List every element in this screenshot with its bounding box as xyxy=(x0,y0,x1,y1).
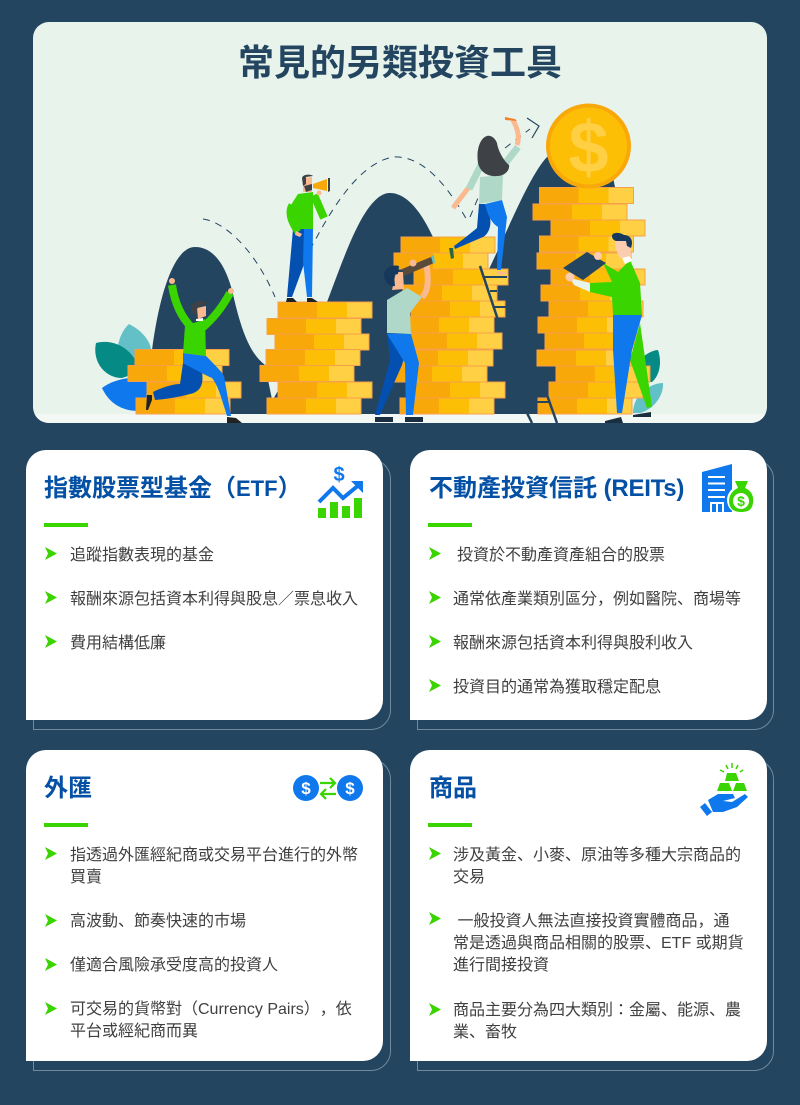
list item: 通常依產業類別區分，例如醫院、商場等 xyxy=(453,591,741,608)
bullet xyxy=(429,591,441,604)
bullet xyxy=(45,958,57,971)
heading: REITs: 不動產投資信託 (REITs) xyxy=(429,475,684,502)
coin stack 3 xyxy=(393,237,508,414)
panel: ETF xyxy=(26,450,383,720)
list item: 費用結構低廉 xyxy=(70,635,166,652)
heading: ETF: 指數股票型基金（ETF） xyxy=(44,475,302,502)
list item: 報酬來源包括資本利得與股利收入 xyxy=(453,635,693,652)
list item: 商品主要分為四大類別：金屬、能源、農 業、畜牧 xyxy=(453,1002,741,1041)
bullet xyxy=(45,914,57,927)
heading: commodities: 商品 xyxy=(429,775,477,802)
accent bar xyxy=(44,523,88,527)
list item: 可交易的貨幣對（Currency Pairs），依 平台或經紀商而異 xyxy=(70,1001,352,1040)
bullet xyxy=(45,847,57,860)
leaves left xyxy=(95,324,151,411)
bullet list: ETF xyxy=(45,546,358,652)
person: man with clipboard xyxy=(563,233,652,423)
person: climbing woman xyxy=(449,117,518,275)
icon: rising chart with dollar xyxy=(318,464,363,518)
bullet xyxy=(429,679,441,692)
list item: 指透過外匯經紀商或交易平台進行的外幣 買賣 xyxy=(70,847,358,886)
bullet xyxy=(429,912,441,925)
person: cheering man xyxy=(146,278,242,423)
bullet list: FX xyxy=(45,846,358,1040)
title: 常見的另類投資工具 xyxy=(238,42,562,83)
ground strip xyxy=(33,414,767,423)
bullet xyxy=(429,547,441,560)
heading: FX: 外匯 xyxy=(44,775,92,802)
bullet xyxy=(429,847,441,860)
dashed trajectory lines xyxy=(203,129,530,297)
list item: 僅適合風險承受度高的投資人 xyxy=(70,957,278,974)
icon: hand holding gold bars xyxy=(700,763,748,816)
accent bar xyxy=(44,823,88,827)
list item: 投資於不動產資產組合的股票 xyxy=(457,547,665,564)
large dollar coin: $ xyxy=(568,108,609,188)
person: man with telescope xyxy=(375,255,435,422)
bullet xyxy=(45,635,57,648)
accent bar xyxy=(428,823,472,827)
list item: 涉及黃金、小麥、原油等多種大宗商品的 交易 xyxy=(453,847,741,886)
bullet xyxy=(429,635,441,648)
decorative outline: ETF xyxy=(33,459,391,730)
panel: hero illustration xyxy=(33,22,767,423)
coin stack 4 xyxy=(533,188,650,414)
person: man with megaphone xyxy=(286,175,330,302)
coin stack 1 xyxy=(128,350,241,414)
icon: currency exchange: $ xyxy=(345,779,355,798)
accent bar xyxy=(428,523,472,527)
bullet xyxy=(45,547,57,560)
decorative outline: FX xyxy=(33,759,391,1071)
panel: REITs xyxy=(410,450,767,720)
leaves right xyxy=(633,350,663,413)
icon: rising chart with dollar: $ xyxy=(333,464,345,486)
decorative outline: commodities xyxy=(417,759,774,1071)
panel: commodities xyxy=(410,750,767,1061)
bullet list: commodities xyxy=(429,846,744,1041)
dark hills xyxy=(148,139,615,414)
list item: 一般投資人無法直接投資實體商品，通 常是透過與商品相關的股票、ETF 或期貨 進行間接投資 xyxy=(453,913,744,974)
panel: FX xyxy=(26,750,383,1061)
bullet xyxy=(429,1003,441,1016)
list item: 投資目的通常為獲取穩定配息 xyxy=(453,679,661,696)
bullet xyxy=(45,1002,57,1015)
list item: 追蹤指數表現的基金 xyxy=(70,547,214,564)
arrow head xyxy=(527,118,539,138)
large dollar coin xyxy=(546,104,631,188)
icon: currency exchange xyxy=(293,775,363,801)
icon: building with money bag: $ xyxy=(737,493,745,509)
illustration: people building coin stacks xyxy=(34,104,766,423)
icon: building with money bag xyxy=(702,464,754,512)
decorative outline: REITs xyxy=(417,459,774,730)
list item: 報酬來源包括資本利得與股息／票息收入 xyxy=(70,591,358,608)
coin stack 2 xyxy=(260,302,372,414)
ladder xyxy=(480,266,557,423)
bullet xyxy=(45,591,57,604)
bullet list: REITs xyxy=(429,546,741,696)
icon: currency exchange: $ xyxy=(301,779,311,798)
list item: 高波動、節奏快速的市場 xyxy=(70,913,246,930)
